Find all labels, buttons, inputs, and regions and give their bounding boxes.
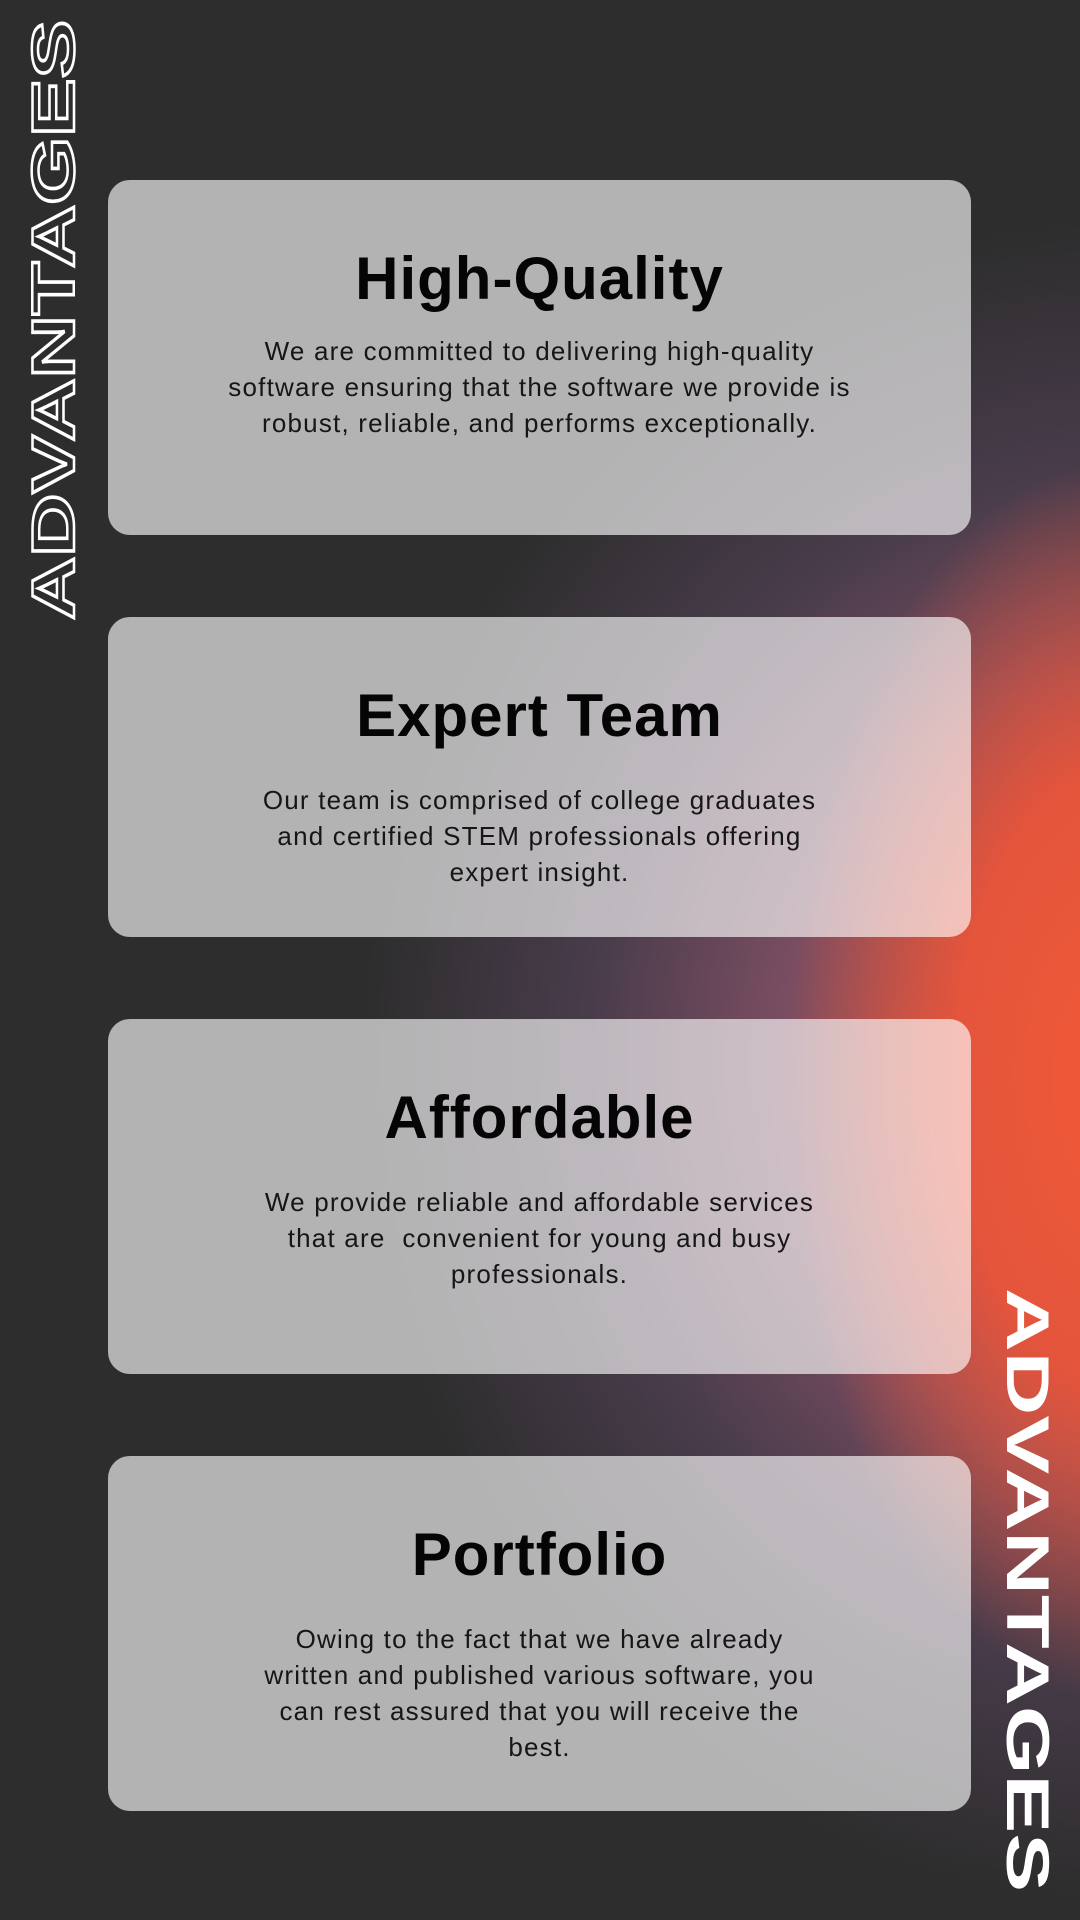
text block: Owing to the fact that we have already (296, 1624, 783, 1654)
vertical title: left outline: ADVANTAGES (20, 20, 87, 620)
heading: High-Quality (355, 245, 724, 312)
text block: best. (508, 1732, 571, 1762)
panel: high-quality (108, 180, 971, 535)
text block: can rest assured that you will receive the (279, 1696, 800, 1726)
panel: affordable (108, 1019, 971, 1374)
vertical title: right filled: ADVANTAGES (994, 1288, 1061, 1892)
text block: written and published various software, you (264, 1660, 815, 1690)
text block: robust, reliable, and performs exceptionally. (262, 408, 817, 438)
text block: and certified STEM professionals offering (277, 821, 802, 851)
heading: Expert Team (356, 682, 723, 749)
text block: professionals. (451, 1259, 628, 1289)
text block: software ensuring that the software we provide is (228, 372, 851, 402)
text block (265, 1187, 814, 1289)
text block (228, 336, 851, 438)
heading: Affordable (384, 1084, 694, 1151)
text block: Our team is comprised of college graduates (263, 785, 816, 815)
text block: We provide reliable and affordable services (265, 1187, 814, 1217)
panel: expert team (108, 617, 971, 937)
text block (263, 785, 816, 887)
text block: that are convenient for young and busy (288, 1223, 791, 1253)
text block (264, 1624, 815, 1762)
heading: Portfolio (412, 1521, 667, 1588)
panel: portfolio (108, 1456, 971, 1811)
text block: We are committed to delivering high-quality (265, 336, 814, 366)
text block: expert insight. (450, 857, 629, 887)
